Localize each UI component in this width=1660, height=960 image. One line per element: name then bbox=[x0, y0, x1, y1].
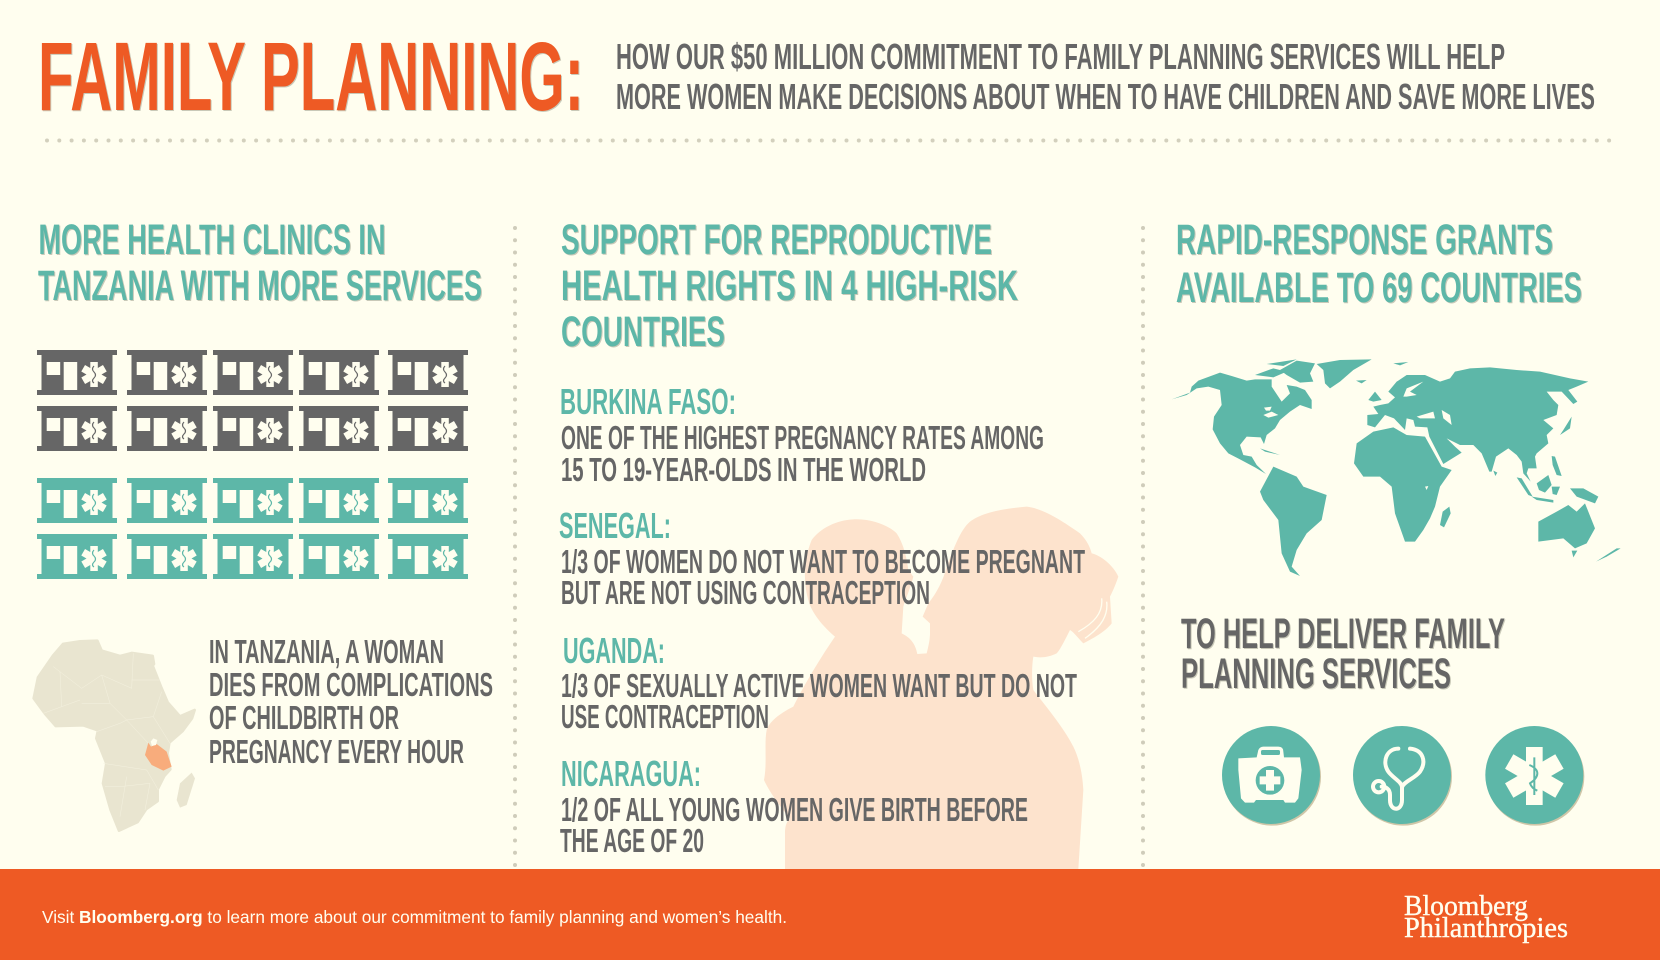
heading: reproductive health rights: HEALTH RIGHTS IN 4 HIGH-RISK bbox=[561, 262, 1018, 310]
text: Tanzania statistic: IN TANZANIA, A WOMAN bbox=[209, 633, 444, 670]
text: Tanzania statistic: OF CHILDBIRTH OR bbox=[209, 699, 399, 736]
country: Uganda: 1/3 OF SEXUALLY ACTIVE WOMEN WANT BUT DO NOT bbox=[561, 667, 1077, 704]
country: Burkina Faso: BURKINA FASO: bbox=[560, 381, 736, 422]
country: Nicaragua: NICARAGUA: bbox=[561, 753, 701, 794]
text: Tanzania statistic bbox=[209, 633, 493, 770]
text: to help deliver bbox=[1181, 610, 1505, 698]
country: Nicaragua bbox=[560, 753, 1028, 859]
country: Burkina Faso: ONE OF THE HIGHEST PREGNANCY RATES AMONG bbox=[561, 419, 1044, 456]
country: Uganda bbox=[561, 630, 1077, 735]
clinic icons: existing clinics bbox=[37, 350, 468, 451]
heading: health clinics bbox=[38, 216, 482, 310]
country: Senegal: BUT ARE NOT USING CONTRACEPTION bbox=[561, 574, 930, 611]
heading: health clinics: TANZANIA WITH MORE SERVICES bbox=[38, 262, 482, 310]
map: Africa with Tanzania highlighted bbox=[34, 641, 195, 831]
icon: first aid kit bbox=[1222, 726, 1321, 826]
heading: rapid-response grants bbox=[1176, 216, 1582, 312]
text: to help deliver: PLANNING SERVICES bbox=[1181, 650, 1451, 698]
clinic icons: new clinics bbox=[37, 478, 468, 579]
silhouette: mother and child bbox=[764, 507, 1118, 869]
title: FAMILY PLANNING: bbox=[38, 22, 584, 131]
logo: Bloomberg Philanthropies: Bloomberg bbox=[1404, 890, 1528, 922]
country: Burkina Faso: 15 TO 19-YEAR-OLDS IN THE WORLD bbox=[561, 451, 926, 488]
logo: Bloomberg Philanthropies bbox=[1404, 890, 1568, 944]
icon: star of life bbox=[1485, 726, 1584, 826]
country: Burkina Faso bbox=[560, 381, 1044, 488]
logo: Bloomberg Philanthropies: Philanthropies bbox=[1404, 912, 1568, 944]
country: Uganda: UGANDA: bbox=[563, 630, 665, 671]
text: Tanzania statistic: PREGNANCY EVERY HOUR bbox=[209, 733, 464, 770]
footer bar bbox=[0, 869, 1660, 960]
subtitle bbox=[616, 36, 1595, 117]
heading: reproductive health rights: SUPPORT FOR REPRODUCTIVE bbox=[561, 216, 992, 264]
country: Senegal bbox=[559, 505, 1085, 611]
heading: health clinics: MORE HEALTH CLINICS IN bbox=[38, 216, 386, 264]
country: Uganda: USE CONTRACEPTION bbox=[561, 698, 769, 735]
icon: stethoscope bbox=[1353, 726, 1452, 826]
heading: reproductive health rights: COUNTRIES bbox=[561, 308, 725, 356]
country: Senegal: SENEGAL: bbox=[559, 505, 671, 546]
map: world bbox=[1172, 359, 1621, 576]
country: Nicaragua: 1/2 OF ALL YOUNG WOMEN GIVE BIRTH BEFORE bbox=[561, 791, 1028, 828]
heading: reproductive health rights bbox=[561, 216, 1018, 356]
country: Nicaragua: THE AGE OF 20 bbox=[560, 822, 704, 859]
footer text: Visit Bloomberg.org to learn more about our commitment to family planning and women’s health. bbox=[42, 907, 787, 927]
text: Tanzania statistic: DIES FROM COMPLICATIONS bbox=[209, 666, 493, 703]
country: Senegal: 1/3 OF WOMEN DO NOT WANT TO BECOME PREGNANT bbox=[561, 543, 1085, 580]
